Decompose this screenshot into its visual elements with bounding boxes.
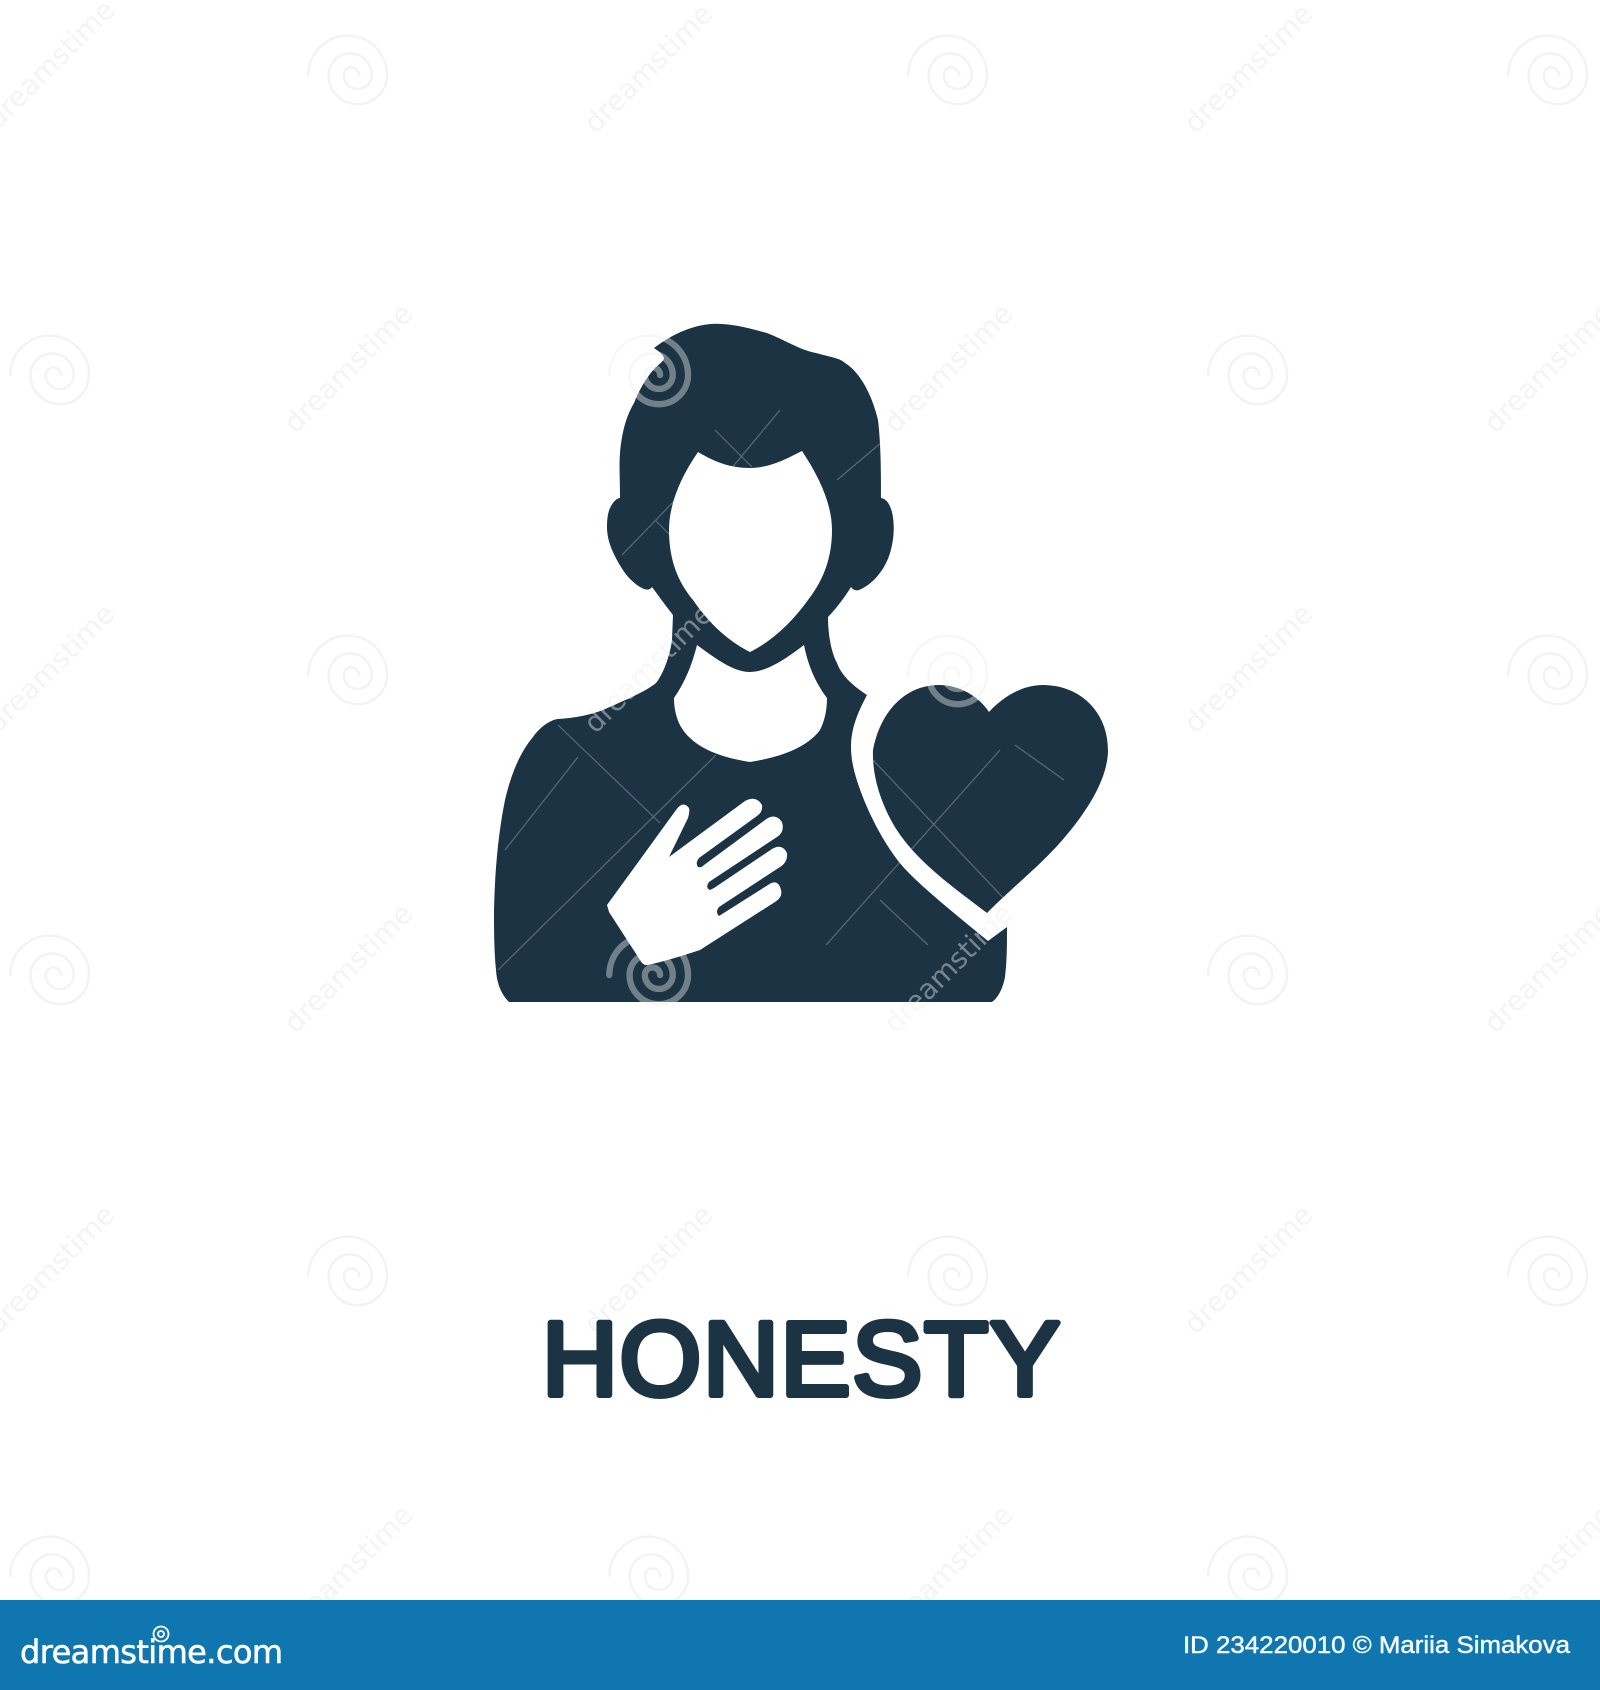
background watermark text: dreamstime: [1177, 597, 1319, 739]
background watermark text: dreamstime: [877, 1498, 1019, 1640]
background watermark text: dreamstime: [277, 1498, 419, 1640]
background watermark text: dreamstime: [1177, 0, 1319, 139]
background watermark text: dreamstime: [277, 297, 419, 439]
person silhouette: [494, 324, 1007, 1002]
title: HONESTY: [542, 1301, 1060, 1418]
background watermark text: dreamstime: [577, 597, 719, 739]
icon: person with hand on chest and heart: [494, 324, 1108, 1039]
background watermark text: dreamstime: [877, 297, 1019, 439]
background watermark text: dreamstime: [577, 0, 719, 139]
logo spiral: [154, 1626, 168, 1642]
footer bar: [0, 1600, 1600, 1690]
watermark text over the figure: dreamstime: [877, 897, 1019, 1039]
heart: [873, 685, 1108, 913]
face: [669, 451, 832, 652]
background watermark text: dreamstime: [277, 897, 419, 1039]
background watermark text: dreamstime: [877, 897, 1019, 1039]
watermark text over the figure: [577, 597, 1019, 1039]
hand: [607, 799, 787, 965]
watermark spirals over the figure: [609, 336, 987, 1004]
background watermark text: dreamstime: [1177, 1198, 1319, 1340]
logo text: dreamstime.com: [20, 1633, 283, 1671]
neck: [674, 645, 827, 762]
watermark text over the figure: dreamstime: [577, 597, 719, 739]
image credit: ID 234220010 © Mariia Simakova: [1183, 1632, 1571, 1659]
watermark lines over the figure: [498, 410, 1064, 970]
background watermark text: dreamstime: [577, 1198, 719, 1340]
